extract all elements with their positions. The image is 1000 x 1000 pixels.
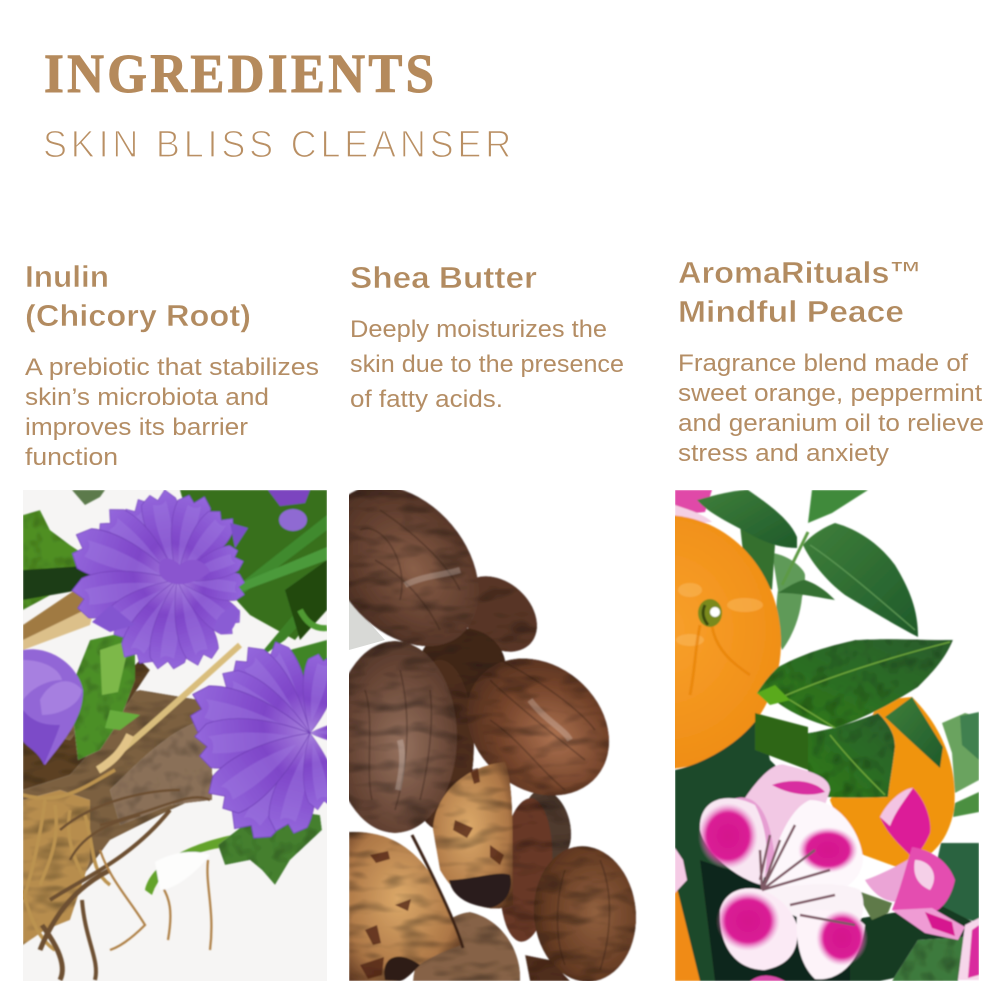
body: aromarituals description [678,350,984,467]
subtitle: SKIN BLISS CLEANSER [43,124,515,166]
flower: left chicory bud [23,649,83,765]
body: shea butter description: skin due to the presence [350,351,624,378]
heading: inulin [25,259,251,333]
heading: shea butter: Shea Butter [350,260,537,295]
image: shea nuts [349,490,638,981]
heading: inulin: Inulin [25,259,109,294]
foliage: dark [675,639,979,981]
flower: geranium bud [855,788,965,940]
panel: aromarituals text [678,255,984,467]
orange: upper [675,514,782,770]
image: chicory root and flowers [23,488,359,981]
heading: aromarituals: AromaRituals™ [678,255,922,290]
body: aromarituals description: Fragrance blend made of [678,350,968,377]
heading: inulin: (Chicory Root) [25,298,251,333]
orange: right [830,697,955,870]
body: shea butter description: Deeply moisturizes the [350,316,607,343]
panel: shea butter text [350,260,624,413]
orange: lower left [675,883,716,981]
body: aromarituals description: and geranium oil to relieve [678,410,984,437]
body: shea butter description: of fatty acids. [350,386,503,413]
body: aromarituals description: stress and anxiety [678,440,889,467]
flower: lower chicory [189,640,327,840]
image: orange, peppermint and geranium [675,490,979,981]
body: inulin description [25,354,319,471]
body: aromarituals description: sweet orange, peppermint [678,380,982,407]
flower: upper chicory [65,488,247,673]
panel: inulin text [25,259,319,471]
body: inulin description: skin’s microbiota and [25,384,269,411]
body: inulin description: improves its barrier [25,414,248,441]
body: inulin description: function [25,444,118,471]
title: INGREDIENTS [44,44,440,104]
body: shea butter description [350,316,624,413]
heading: aromarituals [678,255,922,329]
leaves: peppermint [697,490,918,650]
body: inulin description: A prebiotic that stabilizes [25,354,319,381]
heading: aromarituals: Mindful Peace [678,294,904,329]
flower: geranium [675,765,979,981]
